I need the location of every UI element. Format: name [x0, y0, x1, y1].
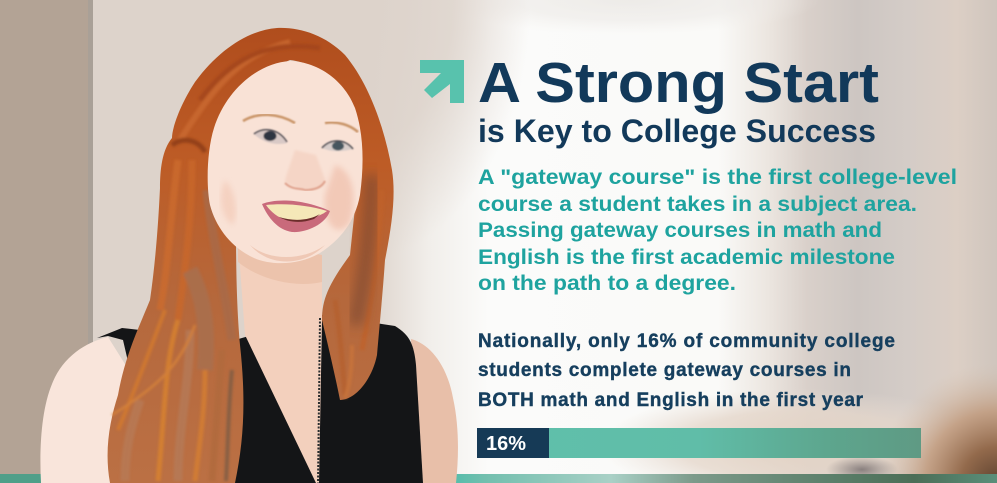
- icon: up-right arrow: [420, 60, 464, 103]
- eyebrows: [243, 115, 295, 123]
- neckline trim: [318, 318, 320, 483]
- gateway course definition: [478, 166, 957, 295]
- title: [478, 51, 879, 149]
- portrait of smiling student: [40, 28, 458, 483]
- gateway course definition: course a student takes in a subject area.: [478, 193, 917, 216]
- dark hair shadow: [355, 175, 372, 325]
- national statistic text: [478, 331, 895, 411]
- right arm: [411, 339, 458, 483]
- hair strands: [112, 42, 382, 481]
- face: [208, 61, 363, 263]
- subtitle: is Key to College Success: [478, 113, 876, 149]
- national statistic text: BOTH math and English in the first year: [478, 390, 864, 411]
- gateway course definition: English is the first academic milestone: [478, 246, 895, 269]
- progress bar: 16%: 16%: [486, 433, 526, 455]
- gateway course definition: on the path to a degree.: [478, 272, 736, 295]
- gateway course definition: A "gateway course" is the first college-level: [478, 166, 957, 189]
- eyes: [254, 130, 353, 151]
- bottom band: [0, 474, 997, 483]
- hair: [108, 28, 394, 483]
- progress bar: 16%: [477, 428, 921, 458]
- left arm: [40, 337, 135, 483]
- black sleeveless top: [97, 315, 423, 483]
- mouth: [262, 201, 330, 232]
- gateway course definition: Passing gateway courses in math and: [478, 219, 882, 242]
- nose: [285, 181, 325, 190]
- national statistic text: Nationally, only 16% of community college: [478, 331, 895, 352]
- neck and chest: [238, 240, 322, 483]
- title: A Strong Start: [478, 51, 879, 115]
- national statistic text: students complete gateway courses in: [478, 360, 851, 381]
